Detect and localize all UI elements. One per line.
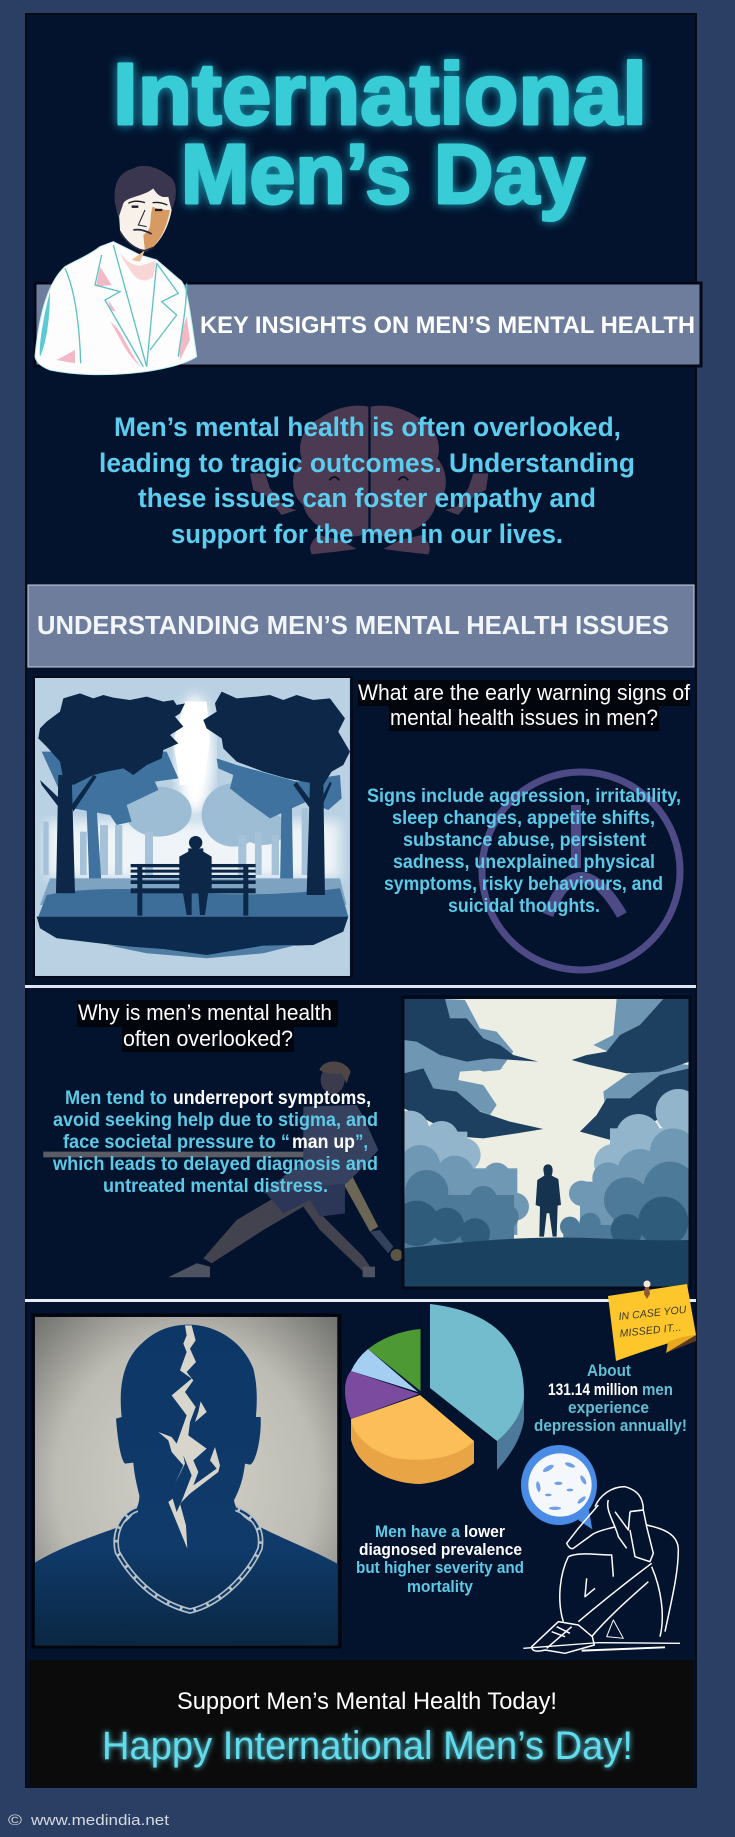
intro text: Men’s mental health is often overlooked,	[114, 412, 621, 442]
text: signs: substance abuse, persistent	[403, 830, 647, 851]
text: why overlooked: untreated mental distress.	[103, 1176, 328, 1197]
heading: early warning signs	[358, 680, 691, 731]
banner: key insights	[35, 283, 701, 366]
text: 131.14 million: experience	[568, 1399, 649, 1417]
text: why overlooked: ”,	[355, 1132, 368, 1153]
illustration: man in white coat	[35, 166, 197, 375]
text: signs: symptoms, risky behaviours, and	[384, 874, 663, 895]
pie chart	[345, 1304, 524, 1484]
text: 131.14 million: men	[642, 1381, 673, 1399]
sticky note: MISSED IT...	[619, 1322, 682, 1340]
text: lower diagnosed prevalence: mortality	[407, 1578, 474, 1596]
text: lower diagnosed prevalence: diagnosed prevalence	[359, 1541, 522, 1559]
text: why overlooked: Men tend to	[65, 1088, 167, 1109]
banner: understanding	[28, 585, 694, 667]
divider	[25, 1299, 696, 1302]
intro text: these issues can foster empathy and	[138, 483, 596, 513]
banner: understanding: UNDERSTANDING MEN’S MENTAL HEALTH ISSUES	[37, 610, 669, 640]
image border	[34, 677, 352, 977]
image: man beneath clouds	[391, 999, 701, 1287]
text: why overlooked: man up	[292, 1132, 355, 1153]
title	[113, 46, 647, 221]
image border	[33, 1315, 340, 1647]
text: why overlooked: face societal pressure to “	[63, 1132, 290, 1153]
title: Men’s Day	[181, 127, 585, 221]
title: International	[113, 46, 647, 143]
image: fractured head silhouette with chain	[35, 1317, 337, 1645]
footer band: Support Men’s Mental Health Today!	[177, 1688, 557, 1715]
footer band	[29, 1660, 694, 1787]
text: signs: sadness, unexplained physical	[393, 852, 655, 873]
title: Men’s Day	[181, 127, 585, 221]
intro text	[99, 412, 635, 549]
sticky note: IN CASE YOU	[618, 1304, 687, 1323]
text: 131.14 million: depression annually!	[534, 1417, 687, 1435]
text: lower diagnosed prevalence: but higher severity and	[356, 1559, 524, 1577]
text: why overlooked	[52, 1088, 378, 1197]
text: signs: sleep changes, appetite shifts,	[392, 808, 655, 829]
text: signs	[367, 786, 681, 917]
divider	[25, 985, 696, 988]
heading: why overlooked: often overlooked?	[123, 1026, 293, 1051]
banner: key insights: KEY INSIGHTS ON MEN’S MENTAL HEALTH	[200, 312, 695, 339]
text: lower diagnosed prevalence: lower	[464, 1523, 506, 1541]
source credit: ©	[8, 1812, 22, 1829]
text: 131.14 million: 131.14 million	[548, 1381, 638, 1399]
text: signs: Signs include aggression, irritability,	[367, 786, 681, 807]
text: lower diagnosed prevalence	[356, 1523, 524, 1596]
text: lower diagnosed prevalence: Men have a	[375, 1523, 461, 1541]
text: why overlooked: which leads to delayed diagnosis and	[52, 1154, 378, 1175]
icon: thought bubble with scribble	[521, 1445, 597, 1529]
background icon: brain	[250, 406, 488, 554]
image border	[403, 997, 690, 1288]
background icon: man pulling rope	[43, 1061, 403, 1277]
intro text: support for the men in our lives.	[171, 519, 563, 549]
sticky note	[608, 1280, 696, 1361]
heading: why overlooked: Why is men’s mental health	[78, 1000, 332, 1025]
text: 131.14 million: About	[587, 1362, 631, 1380]
text: why overlooked: avoid seeking help due to stigma, and	[53, 1110, 378, 1131]
text: 131.14 million	[534, 1362, 687, 1435]
source credit: www.medindia.net	[30, 1812, 170, 1829]
heading: why overlooked	[77, 1000, 338, 1052]
text: signs: suicidal thoughts.	[448, 896, 600, 917]
heading: early warning signs: mental health issues in men?	[390, 705, 658, 730]
title: International	[113, 46, 647, 143]
footer band: Happy International Men’s Day!	[102, 1724, 633, 1768]
intro text: leading to tragic outcomes. Understanding	[99, 448, 635, 478]
background icon: sad face	[482, 772, 680, 970]
text: why overlooked: underreport symptoms,	[173, 1088, 371, 1109]
icon: sitting distressed man	[523, 1487, 680, 1653]
image: man on park bench	[35, 678, 350, 976]
heading: early warning signs: What are the early warning signs of	[358, 680, 691, 705]
